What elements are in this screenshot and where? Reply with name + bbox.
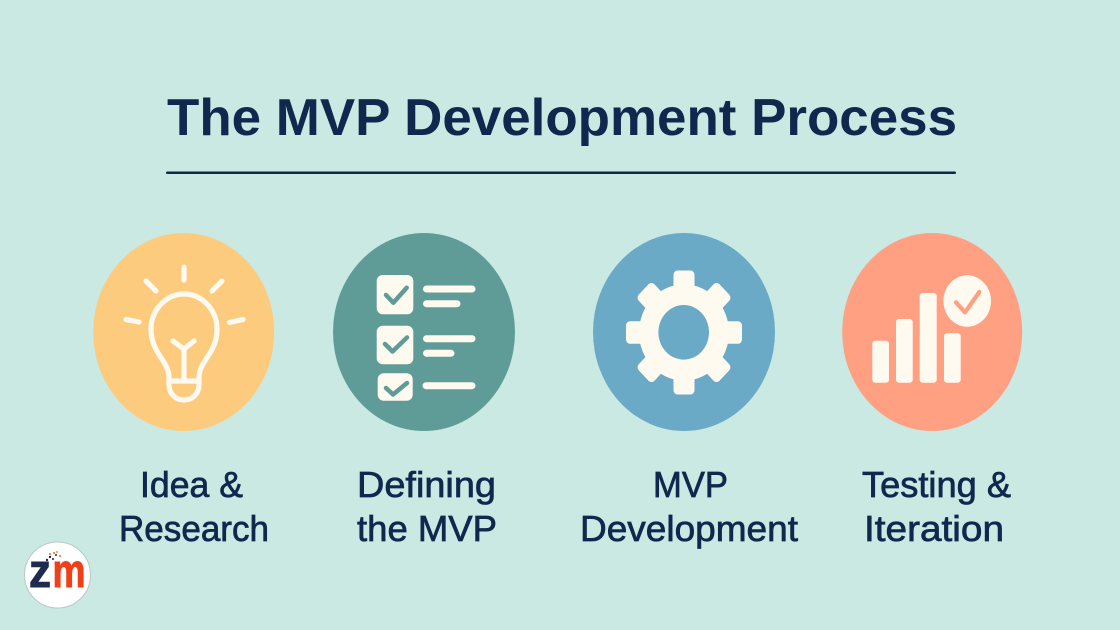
panel: testing and iteration [842,233,1022,549]
label: idea and research: Idea & [140,464,243,505]
title: The MVP Development Process [167,89,957,147]
logo: zm [24,542,90,608]
icon: gear [593,233,775,431]
logo: zm: z [29,544,51,597]
label: testing and iteration: Iteration [864,508,1004,549]
panel: idea and research [93,233,274,549]
label: testing and iteration: Testing & [862,464,1011,505]
label: defining the MVP: Defining [357,464,496,505]
label: idea and research: Research [119,508,269,549]
logo: zm: m [52,544,86,597]
icon: light bulb [93,233,274,431]
label: MVP development: Development [580,508,798,549]
label: defining the MVP: the MVP [357,508,497,549]
panel: defining the MVP [333,233,515,549]
panel: MVP development [580,233,798,549]
icon: bar chart with check [842,233,1022,431]
icon: checklist [333,233,515,431]
label: MVP development: MVP [653,464,728,505]
